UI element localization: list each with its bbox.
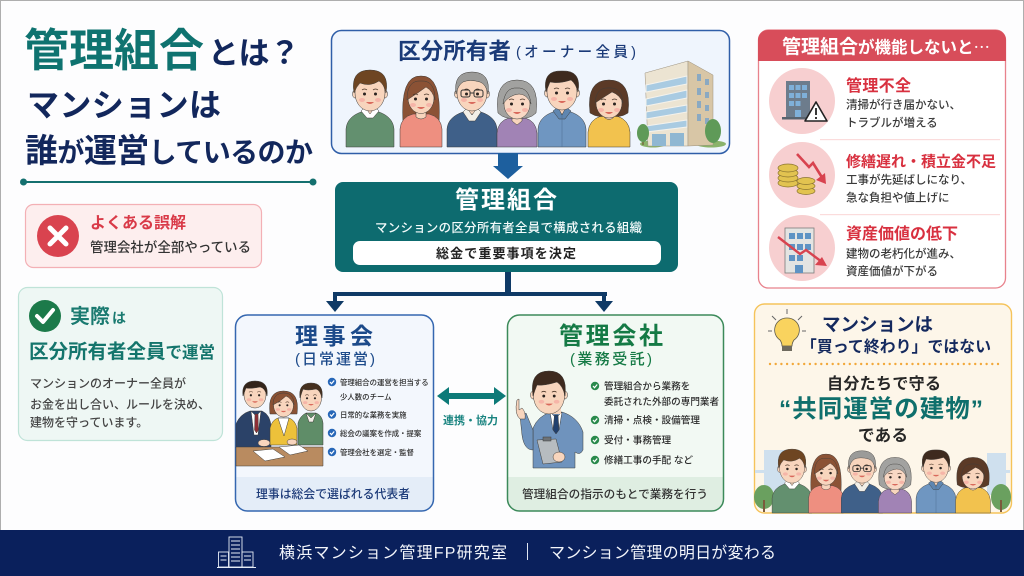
board members illustration	[236, 381, 323, 466]
reality statement: 区分所有者全員で運営	[29, 341, 215, 363]
board duties list: 総会の議案を作成・提案	[340, 429, 422, 438]
owners heading: 区分所有者	[398, 39, 511, 64]
company duties list: 修繕工事の手配 など	[604, 454, 693, 466]
risk heading: 資産価値の低下	[846, 224, 958, 243]
panel: management association	[335, 182, 678, 272]
message statement: “共同運営の建物”	[779, 395, 983, 423]
dotted divider	[770, 363, 998, 365]
message heading: マンションは	[822, 314, 933, 335]
board duties list: 日常的な業務を実施	[340, 410, 407, 420]
icon: footer buildings	[217, 537, 256, 568]
cooperation label: 連携・協力	[443, 413, 498, 427]
message statement: である	[858, 426, 908, 445]
icon: cross	[37, 215, 79, 257]
company worker illustration	[516, 371, 583, 468]
title	[24, 25, 313, 169]
footer organisation name: 横浜マンション管理FP研究室	[279, 544, 507, 562]
title: 誰が運営しているのか	[25, 132, 313, 169]
risk heading: 修繕遅れ・積立金不足	[846, 152, 996, 170]
risk text: 工事が先延ばしになり、	[846, 172, 972, 186]
risk text	[846, 246, 961, 278]
risk header: 管理組合が機能しないと…	[782, 34, 990, 58]
footer bar	[0, 530, 1024, 576]
company duties list: 清掃・点検・設備管理	[604, 414, 700, 426]
company subheading: (業務受託)	[570, 350, 652, 368]
misconception text: 管理会社が全部やっている	[90, 239, 251, 255]
risk text: 建物の老朽化が進み、	[846, 246, 961, 260]
icon: coins and falling arrow	[778, 154, 826, 194]
risk header	[758, 30, 1006, 61]
owners illustration	[346, 70, 630, 147]
footer tagline: マンション管理の明日が変わる	[549, 544, 776, 562]
icon: apartment building	[637, 61, 726, 148]
board duties list: 少人数のチーム	[340, 392, 392, 402]
title: 管理組合	[24, 25, 204, 76]
icon: check	[29, 300, 61, 332]
icon: building with falling arrow	[778, 228, 827, 273]
arrow: cooperation	[437, 387, 506, 427]
panel: owners	[332, 30, 730, 154]
title divider	[20, 178, 316, 186]
title: とは？	[208, 36, 300, 71]
reality body text	[30, 376, 210, 430]
icon: building warning	[782, 81, 827, 121]
board duties list: 管理組合の運営を担当する	[340, 378, 429, 387]
risk text	[846, 172, 972, 204]
company heading: 管理会社	[559, 323, 663, 350]
board footer: 理事は総会で選ばれる代表者	[256, 487, 410, 501]
message statement: 自分たちで守る	[827, 374, 941, 393]
title: マンションは	[27, 87, 221, 123]
board duties list	[328, 378, 429, 457]
risk text: 急な負担や値上げに	[846, 190, 950, 204]
board heading: 理事会	[295, 323, 373, 349]
company duties list	[591, 380, 720, 466]
reality body text: 建物を守っています。	[30, 414, 148, 430]
company duties list: 管理組合から業務を	[604, 380, 690, 392]
association heading: 管理組合	[455, 187, 557, 214]
owners subheading: (オーナー全員)	[516, 44, 636, 61]
company footer: 管理組合の指示のもとで業務を行う	[522, 487, 708, 501]
reality heading: 実際は	[70, 305, 126, 328]
risk heading: 管理不全	[846, 76, 911, 95]
message statement	[779, 374, 983, 445]
connector: association to board and company	[326, 272, 613, 312]
risk: asset value decline	[769, 215, 961, 281]
message heading	[801, 314, 991, 356]
arrow: owners to union	[493, 153, 523, 179]
risk: delayed repairs	[769, 142, 996, 208]
reality body text: マンションのオーナー全員が	[30, 376, 186, 390]
risk text	[846, 98, 961, 130]
company duties list: 受付・事務管理	[604, 434, 672, 446]
panel: reality	[18, 288, 222, 440]
panel: board of directors	[236, 315, 434, 511]
board duties list: 管理会社を選定・監督	[340, 448, 415, 457]
panel: management company	[508, 315, 724, 511]
risk text: トラブルが増える	[846, 116, 938, 130]
panel: if association fails	[758, 30, 1006, 288]
decision pill	[353, 241, 661, 265]
reality body text: お金を出し合い、ルールを決め、	[30, 396, 210, 412]
panel: key message	[754, 304, 1012, 513]
icon: light bulb	[768, 309, 806, 351]
association description: マンションの区分所有者全員で構成される組織	[375, 220, 643, 235]
message heading: 「買って終わり」ではない	[801, 338, 991, 356]
residents illustration	[754, 449, 1011, 513]
misconception heading: よくある誤解	[90, 214, 186, 232]
decision pill: 総金で重要事項を決定	[436, 246, 576, 261]
company duties list: 委託された外部の専門業者	[604, 396, 720, 408]
panel: misconception	[26, 204, 262, 268]
risk text: 清掃が行き届かない、	[846, 98, 961, 112]
risk: poor management	[769, 68, 961, 134]
board subheading: (日常運営)	[295, 351, 375, 368]
risk text: 資産価値が下がる	[846, 264, 938, 278]
footer separator	[527, 543, 528, 560]
